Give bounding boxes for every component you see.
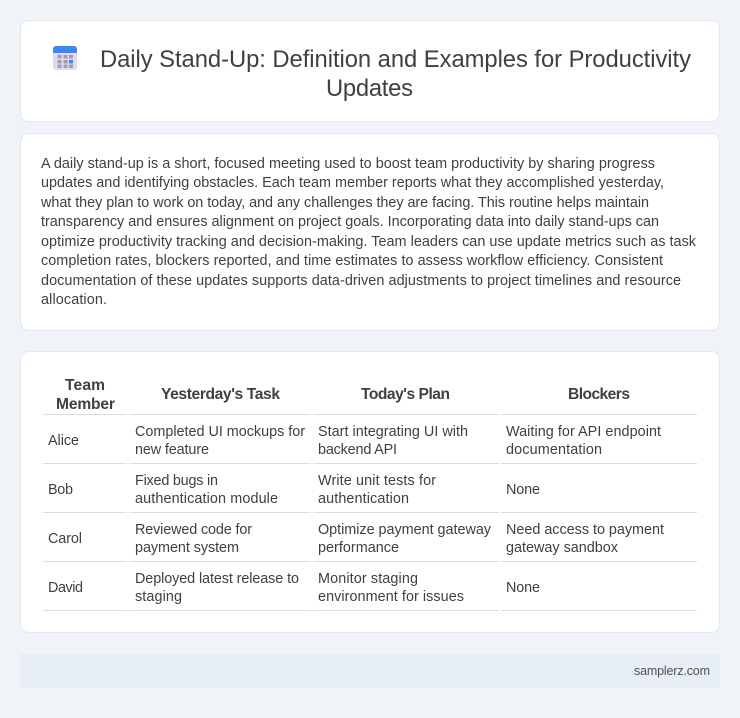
title [100, 46, 691, 102]
table row: Alice: Waiting for API endpoint [506, 424, 661, 440]
text block: definition paragraph [40, 156, 697, 308]
table header row: Team [65, 377, 105, 394]
table row: Alice: Alice [48, 433, 79, 449]
table row: David: staging [135, 589, 182, 605]
text block: definition paragraph: allocation. [41, 292, 107, 308]
table row: Bob: Fixed bugs in [135, 473, 218, 489]
table row: Carol: payment system [135, 540, 239, 556]
table row: Bob: authentication [318, 491, 409, 507]
table row: Carol: gateway sandbox [506, 540, 619, 556]
table row: Carol: Carol [48, 531, 82, 547]
text block: definition paragraph: what they plan to work on today, and any challenges they are facing. This routine helps maintain [40, 195, 649, 211]
panel: description [20, 134, 720, 330]
icon: calendar [53, 46, 77, 70]
table row: Carol: Need access to payment [506, 522, 664, 538]
table header row: Yesterday's Task [161, 386, 280, 403]
table row: David: Deployed latest release to [135, 571, 299, 587]
text block: definition paragraph: completion rates, blockers reported, and time estimates to assess workflow efficiency. Consistent [41, 253, 663, 269]
text block: definition paragraph: documentation of these updates supports data-driven adjustments to project timelines and resource [41, 273, 681, 289]
table row: David: Monitor staging [318, 571, 418, 587]
table row: Alice: Start integrating UI with [318, 424, 468, 440]
table row: David: environment for issues [318, 589, 464, 605]
table row: Bob [43, 473, 697, 513]
table row: Bob: None [506, 482, 540, 498]
table row: Carol: performance [318, 540, 399, 556]
table row: Alice [43, 424, 697, 464]
table header row: Blockers [568, 386, 630, 403]
table row: Bob: Bob [48, 482, 73, 498]
table row: Alice: documentation [506, 442, 602, 458]
table row: Carol: Optimize payment gateway [318, 522, 492, 538]
table row: Alice: Completed UI mockups for [135, 424, 305, 440]
text block: definition paragraph: optimize productivity tracking and decision-making. Team leaders can use update metrics such as task [41, 234, 697, 250]
table row: David: None [506, 580, 540, 596]
table header row: Member [56, 396, 115, 413]
footer [20, 654, 720, 688]
table header row [43, 377, 697, 415]
table row: David: David [48, 580, 83, 596]
table row: Carol [43, 522, 697, 562]
table row: Alice: new feature [135, 442, 209, 458]
panel: stand-up table [20, 352, 720, 632]
title: Daily Stand-Up: Definition and Examples for Productivity [100, 46, 691, 73]
text block: definition paragraph: transparency and ensures alignment on project goals. Incorporating data into daily stand-ups can [41, 214, 659, 230]
table header row: Today's Plan [361, 386, 450, 403]
table row: David [43, 571, 697, 611]
table row: Bob: authentication module [135, 491, 278, 507]
table row: Alice: backend API [318, 442, 397, 458]
text block: definition paragraph: A daily stand-up is a short, focused meeting used to boost team productivity by sharing progress [41, 156, 655, 172]
text block: definition paragraph: updates and identifying obstacles. Each team member reports what they accomplished yesterday, [41, 175, 664, 191]
table row: Bob: Write unit tests for [318, 473, 436, 489]
table row: Carol: Reviewed code for [135, 522, 252, 538]
footer: samplerz.com [634, 664, 710, 678]
panel: title header [20, 20, 720, 122]
title: Updates [326, 75, 413, 102]
